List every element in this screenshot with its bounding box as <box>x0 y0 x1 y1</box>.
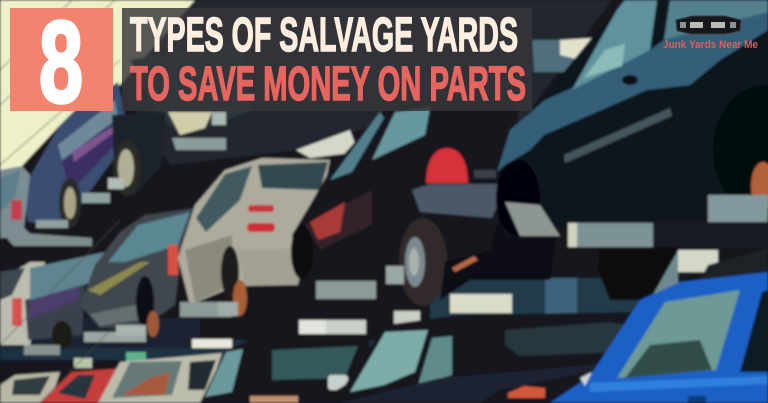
title line 2: TO SAVE MONEY ON PARTS <box>130 58 526 111</box>
title banner <box>122 8 532 111</box>
number badge <box>10 0 113 127</box>
dark convertible <box>315 312 650 403</box>
silver car <box>178 158 330 317</box>
black car in the middle <box>291 96 560 306</box>
power lines <box>0 0 120 403</box>
icon: car front <box>676 16 741 34</box>
logo: Junk Yards Near Me: Junk Yards Near Me <box>663 39 758 51</box>
logo: Junk Yards Near Me <box>663 16 758 51</box>
big navy car top right <box>496 0 768 300</box>
far left grey car <box>0 166 92 246</box>
upper shelf dark structure <box>120 0 612 165</box>
number badge: 8 <box>39 0 83 127</box>
purple van <box>22 82 165 228</box>
dark grey hatchback <box>80 208 195 342</box>
rack background strip <box>0 247 768 368</box>
left lower silver car <box>0 252 105 355</box>
title line 1: TYPES OF SALVAGE YARDS <box>130 9 518 62</box>
sky <box>0 0 195 172</box>
black soft-top car <box>200 336 370 403</box>
lower left small cars <box>0 353 222 403</box>
blue car <box>550 272 768 403</box>
